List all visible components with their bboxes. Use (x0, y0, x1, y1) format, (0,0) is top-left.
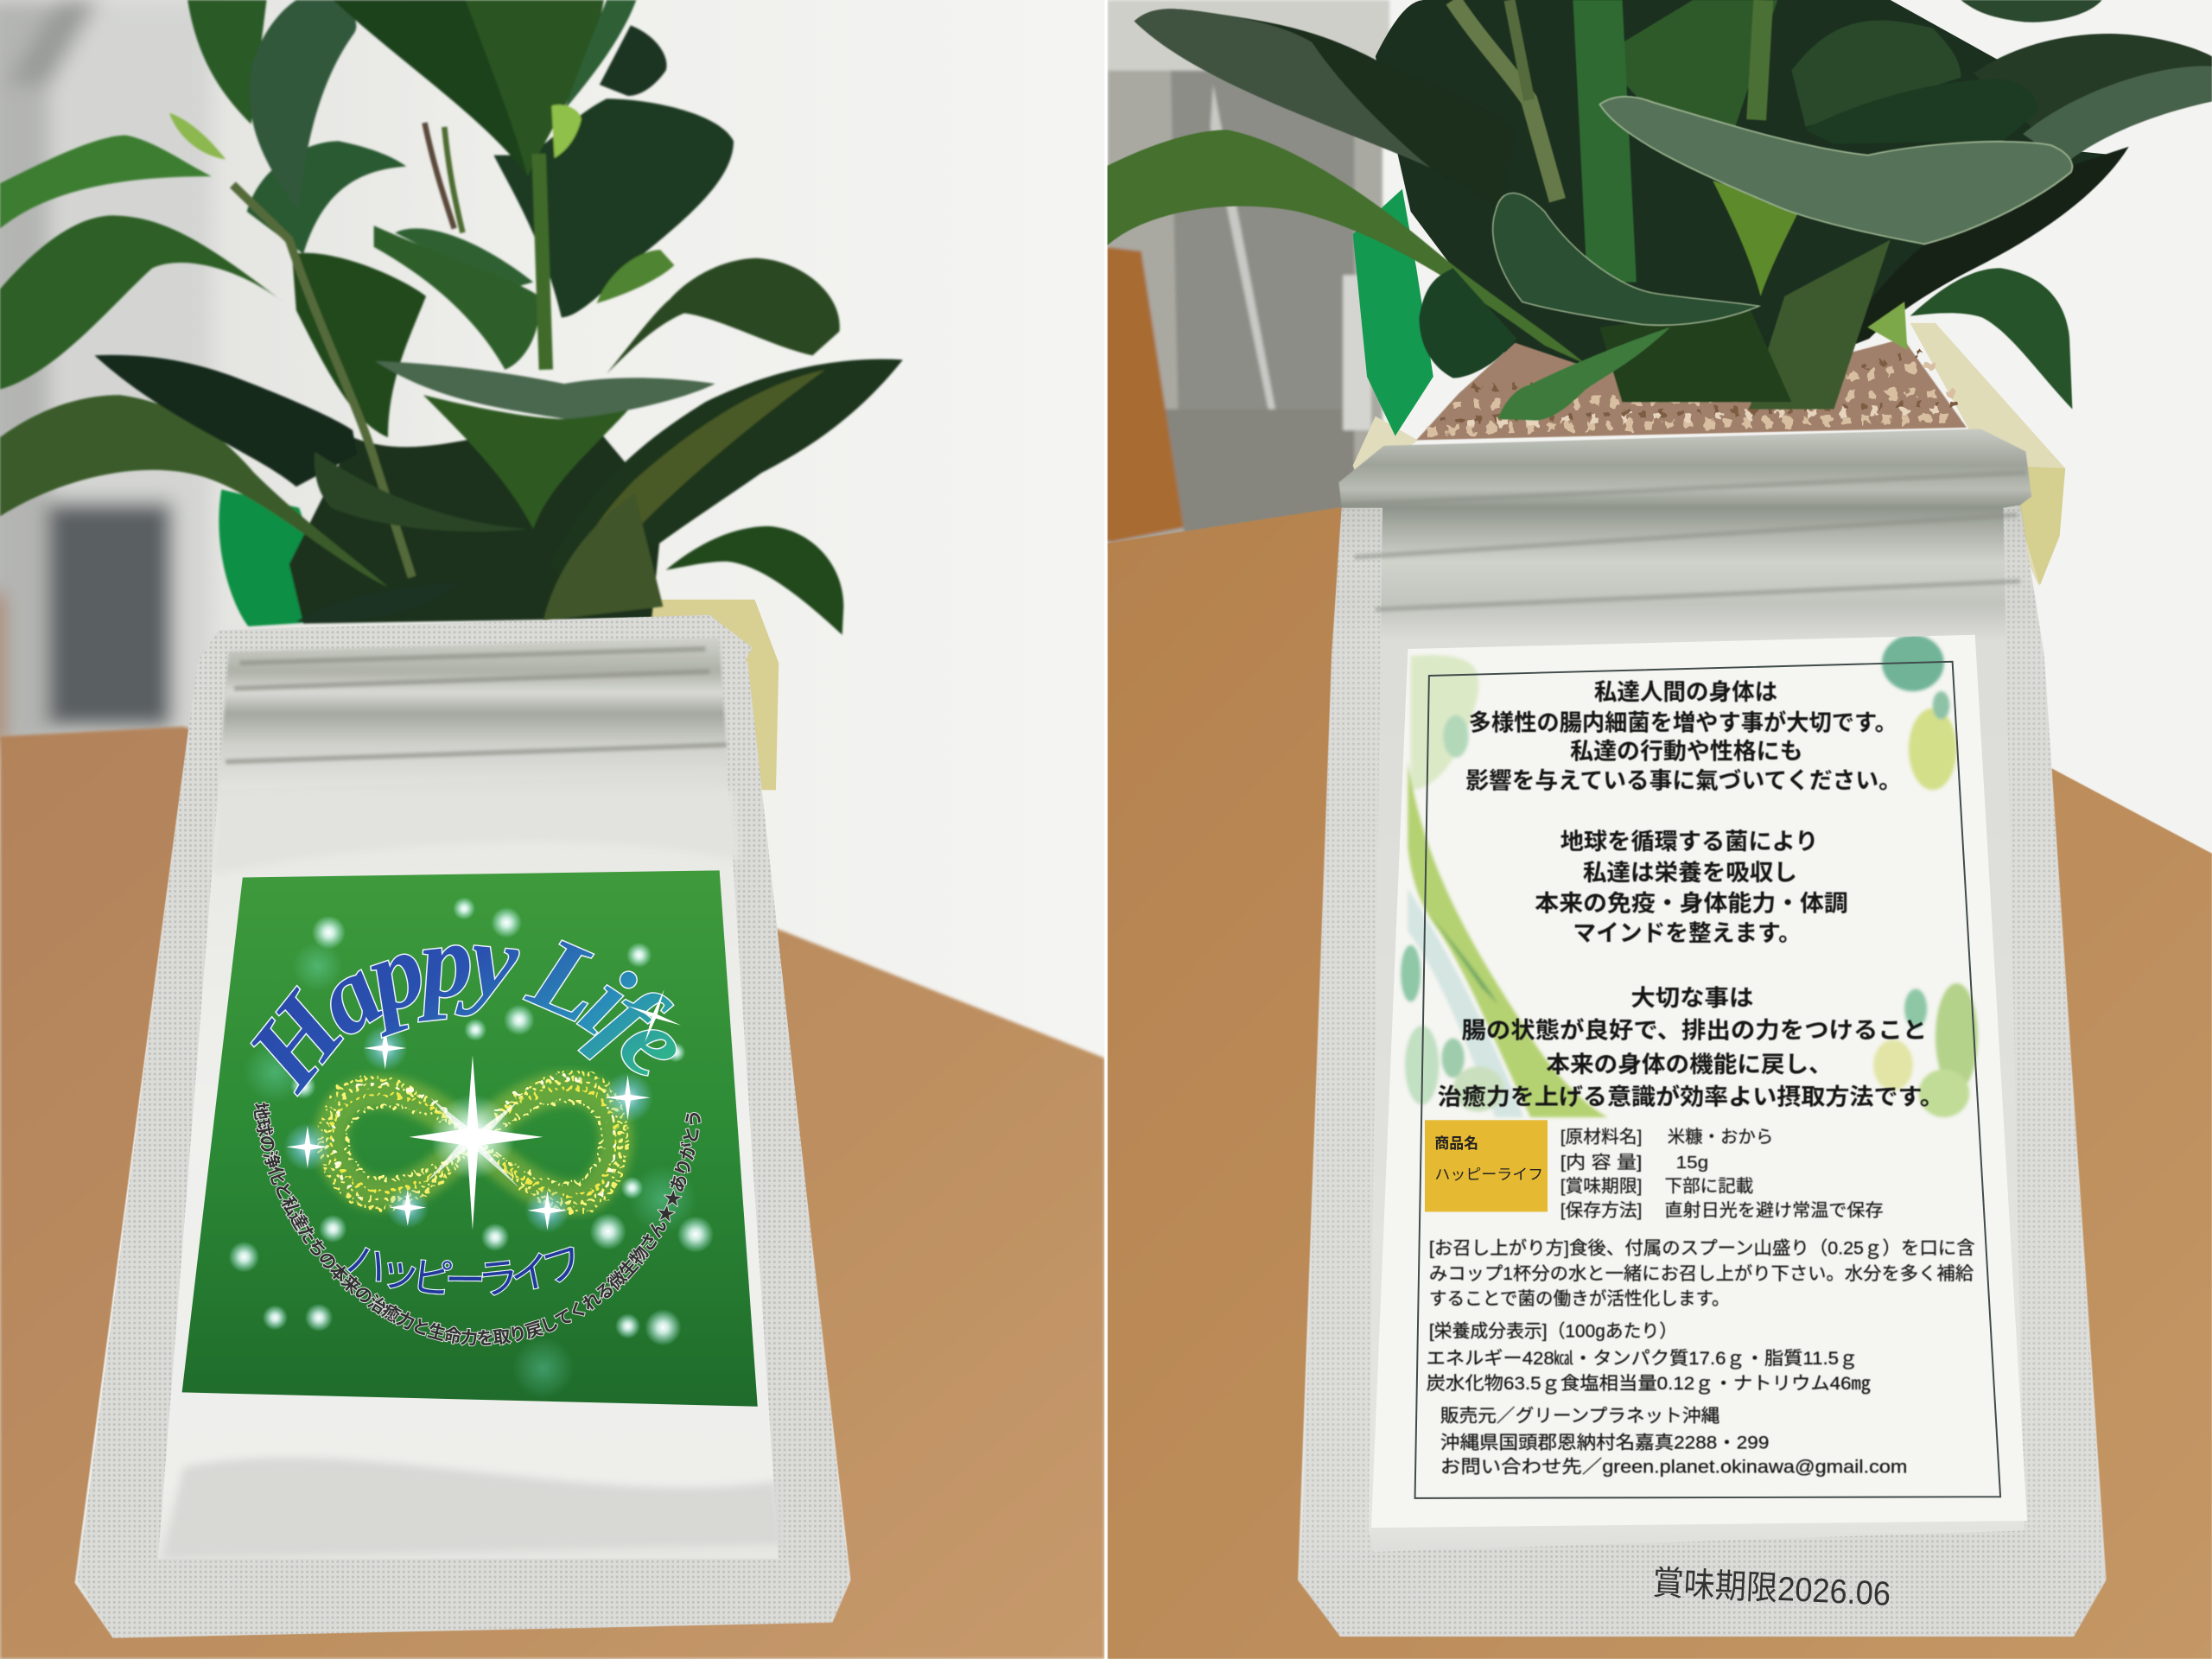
background wall and room (1106, 0, 2212, 1659)
label: Happy Life (181, 870, 758, 1407)
background wall and room (0, 0, 1104, 1659)
main message: 私達人間の身体は (1594, 679, 1777, 705)
main message: 大切な事は (1630, 985, 1753, 1011)
seller information: お問い合わせ先／green.planet.okinawa@gmail.com (1440, 1456, 1907, 1477)
main message: 私達は栄養を吸収し (1583, 860, 1797, 886)
pouch: back (1298, 429, 2107, 1637)
subtitle ハッピーライフ: ハッピーライフ (346, 1246, 575, 1296)
label background (182, 870, 758, 1407)
main message: 地球を循環する菌により (1560, 829, 1818, 855)
main message: 治癒力を上げる意識が効率よい摂取方法です。 (1438, 1083, 1944, 1109)
wooden table (1108, 506, 2212, 1659)
central star (409, 1055, 543, 1230)
main message: 影響を与えている事に氣づいてください。 (1465, 768, 1902, 794)
directions: することで菌の働きが活性化します。 (1429, 1288, 1730, 1309)
logo sparkle (619, 980, 690, 1052)
directions (1429, 1237, 1975, 1309)
pouch: front (75, 615, 850, 1638)
crimped edges (78, 660, 228, 1580)
foil body (75, 615, 850, 1638)
product specification: [内 容 量] (1560, 1153, 1642, 1173)
product specification: [原材料名] (1560, 1127, 1642, 1147)
sparkles (228, 897, 714, 1400)
product name box: 商品名 (1434, 1135, 1478, 1152)
foil folds (1340, 473, 2025, 609)
main message: マインドを整えます。 (1573, 920, 1802, 946)
curved tagline: 地球の浄化と私達たちの本来の治癒力と生命力を取り戻してくれる微生物さん★★ありがとう (252, 1101, 702, 1346)
wooden table (0, 727, 1104, 1659)
product name box (1425, 1120, 1548, 1211)
product specification: 15g (1676, 1154, 1708, 1173)
main message (1438, 679, 1944, 1109)
info label (1371, 635, 2027, 1528)
thin inner border (1415, 662, 2000, 1498)
seller information (1440, 1406, 1907, 1477)
plant (1106, 0, 2212, 421)
panel: left photo (0, 0, 1104, 1659)
seller information: 販売元／グリーンプラネット沖縄 (1440, 1406, 1719, 1427)
foil body (1298, 429, 2107, 1637)
nutrition facts: 炭水化物63.5ｇ食塩相当量0.12ｇ・ナトリウム46㎎ (1427, 1373, 1871, 1395)
product specification: 下部に記載 (1665, 1177, 1753, 1197)
main message: 本来の身体の機能に戻し、 (1546, 1052, 1833, 1077)
wrinkles (212, 790, 741, 874)
watercolour decoration (1401, 635, 1978, 1117)
green plant tag (1353, 189, 1433, 435)
white pot (1353, 323, 2065, 586)
seller information: 沖縄県国頭郡恩納村名嘉真2288・299 (1440, 1433, 1769, 1453)
main message: 本来の免疫・身体能力・体調 (1535, 891, 1848, 917)
product name box: ハッピーライフ (1434, 1166, 1543, 1183)
main message: 多様性の腸内細菌を増やす事が大切です。 (1469, 709, 1897, 736)
product specification: 米糠・おから (1668, 1127, 1773, 1147)
nutrition facts (1427, 1321, 1871, 1395)
expiry date stamp: 賞味期限2026.06 (1651, 1565, 1891, 1613)
logo text: Happy Life (250, 939, 677, 1097)
product specification: 直射日光を避け常温で保存 (1665, 1200, 1884, 1220)
main message: 腸の状態が良好で、排出の力をつけること (1461, 1017, 1927, 1044)
blue sparkle stars (283, 1026, 653, 1233)
panel: right photo (1106, 0, 2212, 1659)
nutrition facts: エネルギー428㎉・タンパク質17.6ｇ・脂質11.5ｇ (1427, 1348, 1858, 1369)
plant pot (650, 600, 779, 790)
directions: [お召し上がり方]食後、付属のスプーン山盛り（0.25ｇ）を口に含 (1429, 1237, 1975, 1258)
plant background mass (1376, 0, 2116, 409)
resealable strip (219, 638, 728, 771)
infinity symbol (320, 1072, 627, 1211)
directions: みコップ1杯分の水と一緒にお召し上がり下さい。水分を多く補給 (1429, 1263, 1974, 1284)
main message: 私達の行動や性格にも (1570, 738, 1803, 764)
product specification: [保存方法] (1560, 1200, 1642, 1220)
plant (0, 0, 903, 635)
product specification (1560, 1127, 1884, 1220)
gravel (1416, 339, 1967, 440)
crimped edges (1300, 508, 1382, 1580)
label paper (1371, 635, 2027, 1528)
product specification: [賞味期限] (1560, 1177, 1642, 1197)
nutrition facts: [栄養成分表示]（100gあたり） (1429, 1321, 1677, 1342)
